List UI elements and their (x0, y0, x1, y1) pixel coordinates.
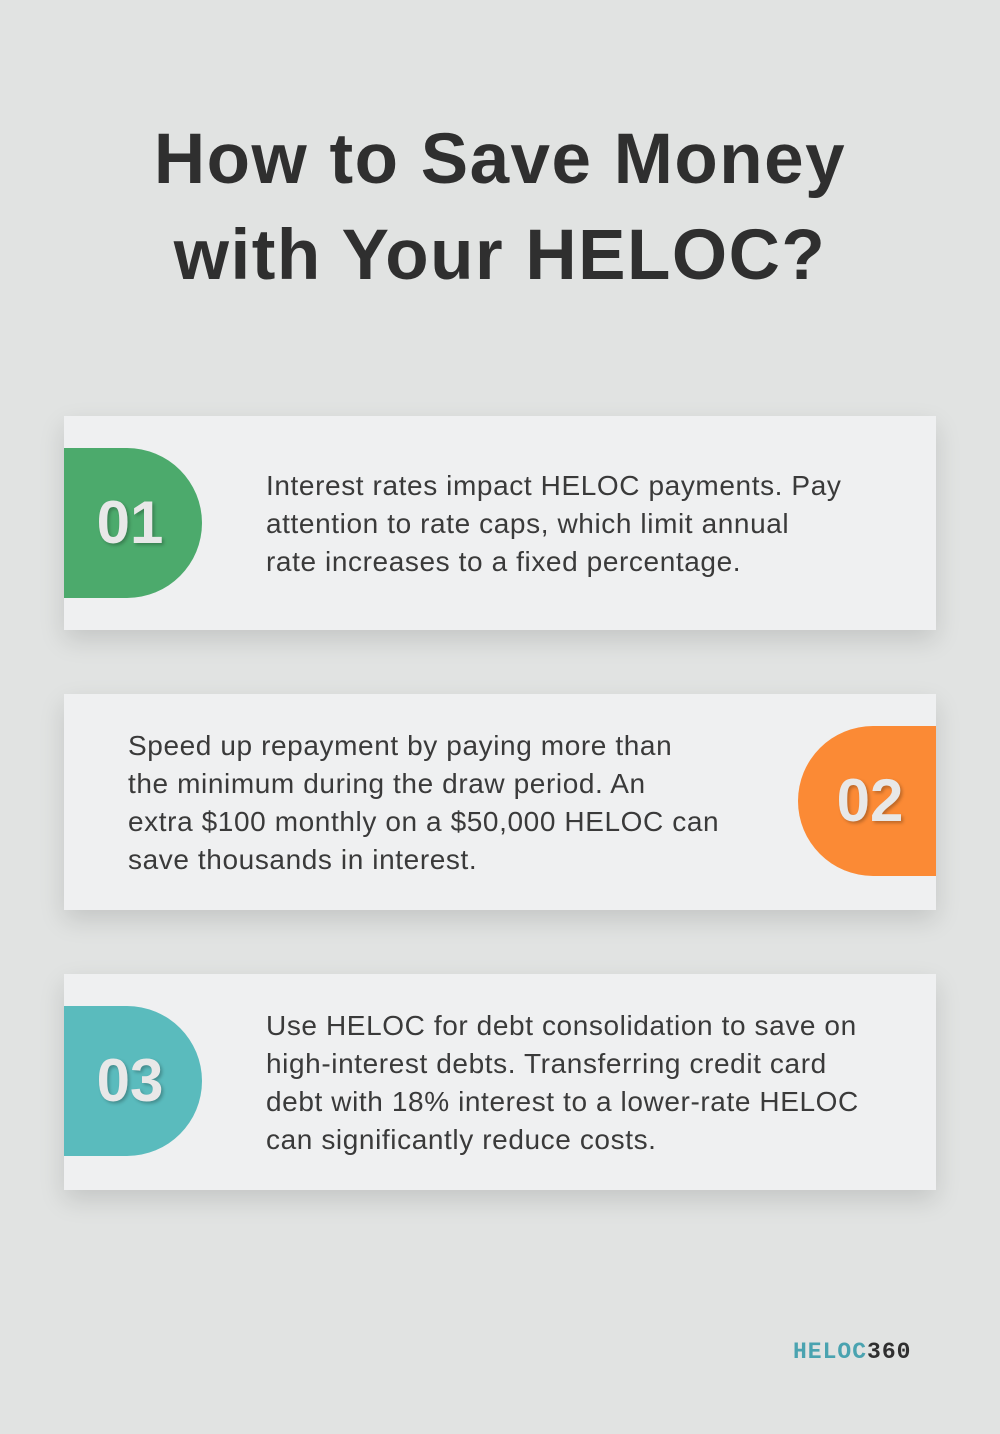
text 1: rate increases to a fixed percentage. (266, 546, 741, 577)
text 3 (266, 1010, 859, 1155)
badge 02 (798, 726, 936, 876)
title (154, 120, 846, 295)
card 1 (64, 416, 936, 630)
text 2: save thousands in interest. (128, 844, 477, 875)
text 3: debt with 18% interest to a lower-rate HELOC (266, 1086, 859, 1117)
badge 01: 01 (97, 489, 163, 556)
text 2 (128, 730, 719, 875)
text 1: attention to rate caps, which limit annual (266, 508, 789, 539)
badge 02: 02 (837, 767, 903, 834)
logo: HELOC360 (793, 1339, 911, 1365)
badge 03: 03 (97, 1047, 163, 1114)
title: How to Save Money (154, 120, 846, 199)
text 3: high-interest debts. Transferring credit card (266, 1048, 827, 1079)
badge 03 (64, 1006, 202, 1156)
text 1 (266, 470, 841, 577)
text 3: can significantly reduce costs. (266, 1124, 657, 1155)
title: with Your HELOC? (174, 216, 826, 295)
text 3: Use HELOC for debt consolidation to save on (266, 1010, 857, 1041)
text 2: extra $100 monthly on a $50,000 HELOC can (128, 806, 719, 837)
text 2: Speed up repayment by paying more than (128, 730, 672, 761)
card 2 (64, 694, 936, 910)
badge 01 (64, 448, 202, 598)
text 1: Interest rates impact HELOC payments. Pay (266, 470, 841, 501)
card 3 (64, 974, 936, 1190)
text 2: the minimum during the draw period. An (128, 768, 646, 799)
